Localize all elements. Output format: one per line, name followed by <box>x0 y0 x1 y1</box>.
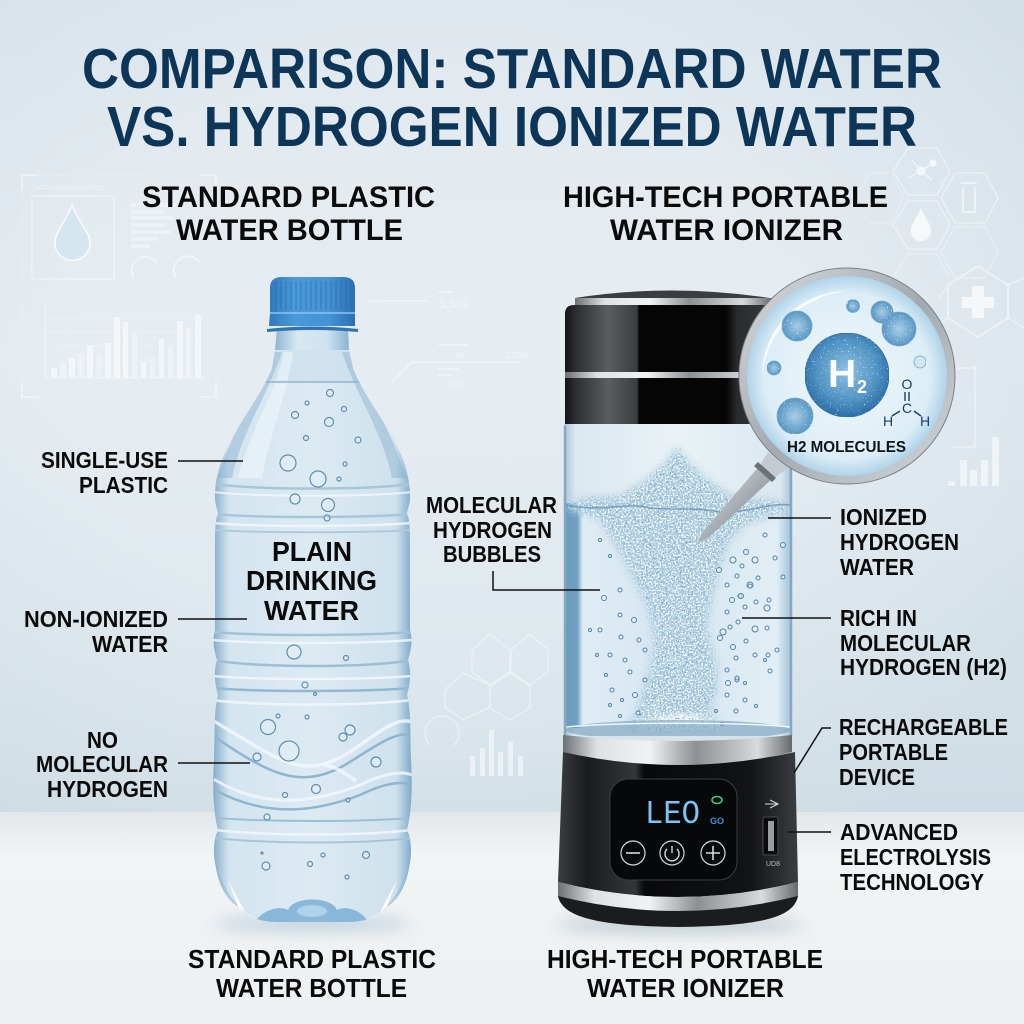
panel: hexagon icon network <box>855 148 1024 337</box>
stat callouts near bottle: 400 <box>455 353 466 359</box>
hex icon: vial <box>961 183 977 212</box>
callout: no molecular hydrogen: MOLECULAR <box>36 751 168 777</box>
hex icon: medical cross <box>962 286 994 318</box>
callout: advanced electrolysis technology <box>840 819 991 895</box>
callout: single-use plastic <box>41 447 168 498</box>
small hexagon and chart backdrop <box>425 634 548 776</box>
panel: data dashboard backdrop <box>22 175 216 397</box>
magnifier handle <box>698 464 774 543</box>
H2 molecule orb: 2 <box>857 377 867 397</box>
caption: high-tech portable water ionizer <box>547 944 823 1003</box>
callout: rich in molecular hydrogen: HYDROGEN (H2) <box>840 654 1007 680</box>
callout: non-ionized water <box>24 606 168 657</box>
caption: high-tech portable water ionizer: HIGH-TECH PORTABLE <box>547 944 823 974</box>
callout: no molecular hydrogen: HYDROGEN <box>47 776 168 802</box>
power button <box>660 841 684 865</box>
title <box>82 37 942 159</box>
formaldehyde formula: C <box>902 400 912 416</box>
water ionizer device <box>555 290 805 931</box>
dashboard bars list <box>131 203 176 248</box>
formaldehyde formula: O <box>902 376 913 392</box>
usb port: UD8 <box>766 861 780 868</box>
base silver ring <box>563 735 792 766</box>
floating bubbles <box>588 533 786 726</box>
icon: water drop <box>55 205 90 260</box>
formaldehyde formula: H <box>883 413 893 429</box>
small bubbles <box>767 300 926 434</box>
bottle floor shadow <box>212 918 412 930</box>
bubble swirl <box>566 446 790 730</box>
bottle label: plain drinking water: DRINKING <box>246 565 377 596</box>
formaldehyde formula: H <box>920 413 930 429</box>
base lower band <box>558 882 798 912</box>
callout: rich in molecular hydrogen: MOLECULAR <box>840 630 971 656</box>
callout: molecular hydrogen bubbles: BUBBLES <box>443 541 541 567</box>
title: VS. HYDROGEN IONIZED WATER <box>107 95 917 159</box>
small chart upper right <box>948 366 999 486</box>
formaldehyde formula <box>883 376 930 429</box>
caption: standard plastic water bottle <box>188 944 436 1003</box>
stat callouts near bottle: 3.5% <box>438 296 468 311</box>
callout: rechargeable portable device: PORTABLE <box>839 739 948 765</box>
bottle label: plain drinking water: PLAIN <box>272 536 352 567</box>
bottle base <box>214 857 250 916</box>
callout: rechargeable portable device <box>839 714 1008 790</box>
callout: molecular hydrogen bubbles: MOLECULAR <box>426 492 557 518</box>
stat callouts near bottle <box>368 292 528 389</box>
bottle detail <box>205 350 420 925</box>
lid <box>565 290 780 424</box>
callout: ionized hydrogen water: WATER <box>840 554 914 580</box>
bottle neck <box>275 328 349 350</box>
callout: advanced electrolysis technology: ELECTROLYSIS <box>840 844 991 870</box>
heading: standard bottle <box>142 181 435 247</box>
callout: ionized hydrogen water <box>840 504 959 580</box>
callout: molecular hydrogen bubbles <box>426 492 557 567</box>
bottle cap <box>267 277 358 332</box>
callout: rich in molecular hydrogen <box>840 605 1007 680</box>
base body <box>558 752 798 897</box>
lens caption: H2 MOLECULES <box>787 439 906 456</box>
heading: ionizer <box>563 181 888 247</box>
heading: ionizer: HIGH-TECH PORTABLE <box>563 181 888 214</box>
usb port <box>763 800 780 868</box>
leader lines <box>178 461 831 832</box>
callout: single-use plastic: PLASTIC <box>79 472 168 498</box>
callout: ionized hydrogen water: IONIZED <box>840 504 927 530</box>
caption: high-tech portable water ionizer: WATER IONIZER <box>587 973 784 1003</box>
callout: no molecular hydrogen: NO <box>87 727 118 753</box>
hex icon: droplet <box>911 208 931 241</box>
callout: molecular hydrogen bubbles: HYDROGEN <box>433 517 552 543</box>
dashboard gauges <box>132 256 200 278</box>
plastic water bottle <box>205 277 420 930</box>
base foot <box>558 896 798 927</box>
bottle label: plain drinking water <box>246 536 377 626</box>
title: COMPARISON: STANDARD WATER <box>82 37 942 101</box>
dashboard caption: DATN DRAGNSAFICS <box>33 185 103 192</box>
callout: non-ionized water: WATER <box>92 631 168 657</box>
bottle body <box>213 350 412 922</box>
bottle label: plain drinking water: WATER <box>264 595 359 626</box>
glass edge lines <box>565 426 791 736</box>
dashboard bar chart <box>51 315 201 378</box>
callout: non-ionized water: NON-IONIZED <box>24 606 168 632</box>
display panel: GO <box>710 816 724 826</box>
hex icon: molecule <box>908 160 936 180</box>
device floor shadow <box>555 919 805 931</box>
callout: ionized hydrogen water: HYDROGEN <box>840 529 959 555</box>
callout: single-use plastic: SINGLE-USE <box>41 447 168 473</box>
callout: rich in molecular hydrogen: RICH IN <box>840 605 917 631</box>
plus button <box>701 841 725 865</box>
H2 molecule orb <box>805 333 889 417</box>
callout: advanced electrolysis technology: ADVANCED <box>840 819 958 845</box>
stat callouts near bottle: 1.20S <box>446 382 465 389</box>
minus button <box>621 841 645 865</box>
H2 molecule orb: H <box>828 353 856 396</box>
heading: ionizer: WATER IONIZER <box>610 214 843 247</box>
callout: rechargeable portable device: DEVICE <box>839 764 915 790</box>
callout: no molecular hydrogen <box>36 727 168 802</box>
surface line <box>566 505 790 512</box>
heading: standard bottle: WATER BOTTLE <box>176 214 403 247</box>
display panel: LEO <box>645 796 700 833</box>
caption: standard plastic water bottle: WATER BOTTLE <box>216 973 407 1003</box>
lens <box>743 272 951 480</box>
magnifier <box>698 268 955 543</box>
glass cylinder <box>564 422 792 736</box>
caption: standard plastic water bottle: STANDARD PLASTIC <box>188 944 436 974</box>
display panel <box>610 779 737 880</box>
stat callouts near bottle: 1.025 <box>505 350 528 360</box>
bottle bubbles <box>253 390 381 879</box>
heading: standard bottle: STANDARD PLASTIC <box>142 181 435 214</box>
water column <box>566 446 790 740</box>
callout: advanced electrolysis technology: TECHNOLOGY <box>840 869 984 895</box>
